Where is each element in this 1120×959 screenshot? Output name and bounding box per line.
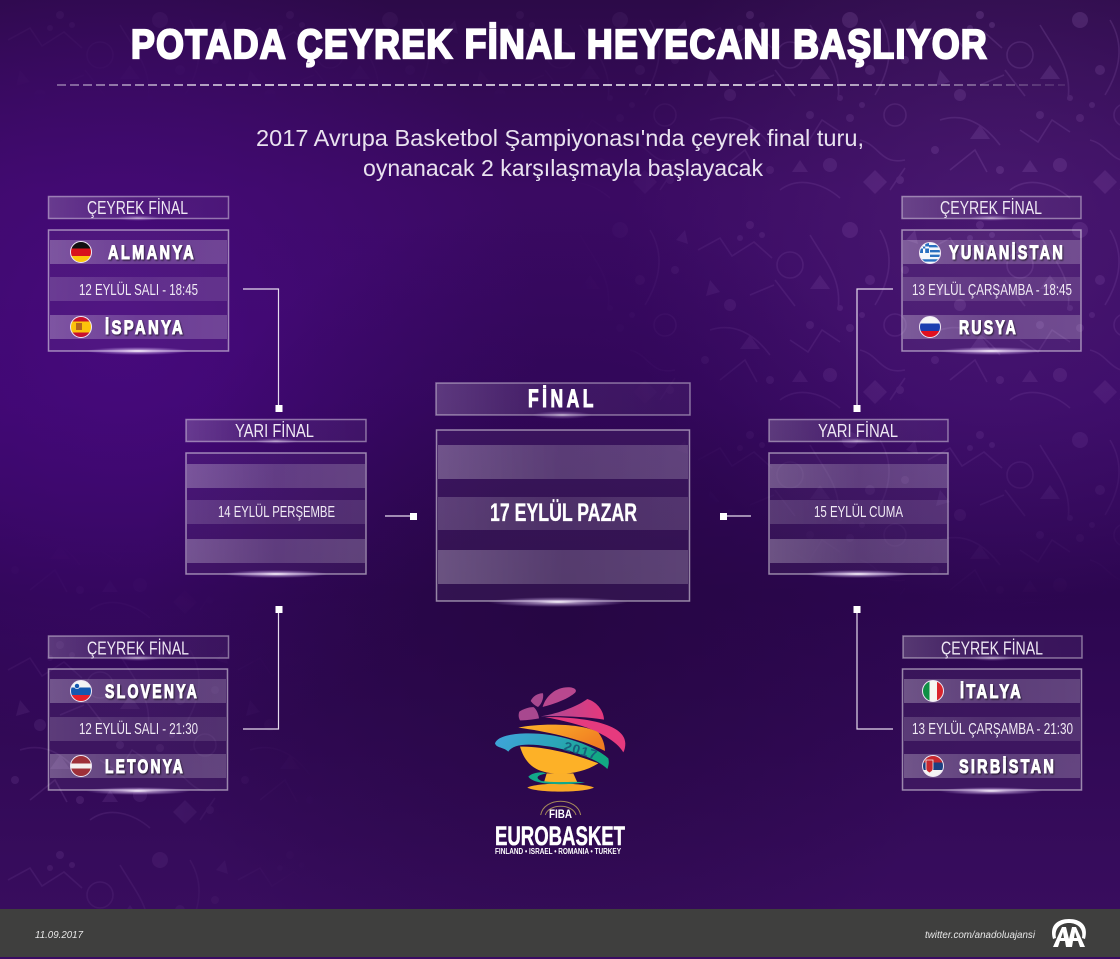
- subtitle: [256, 125, 864, 181]
- heading: semi final label: YARI FİNAL: [818, 421, 898, 441]
- match date: 17 EYLÜL PAZAR: [490, 498, 637, 527]
- team name: ALMANYA: [108, 243, 196, 264]
- panel: quarter final Slovenia-Latvia: [48, 636, 228, 795]
- heading: semi final label: YARI FİNAL: [235, 421, 314, 441]
- team name: LETONYA: [105, 757, 185, 778]
- heading: quarter final label: [48, 196, 228, 221]
- panel: left semi final: [186, 420, 366, 578]
- icon: Anadolu Agency logo: [1052, 919, 1086, 947]
- panel: quarter final Greece-Russia: [902, 196, 1081, 355]
- heading: quarter final label: [48, 636, 228, 661]
- heading: final label: FİNAL: [528, 385, 597, 413]
- title: POTADA ÇEYREK FİNAL HEYECANI BAŞLIYOR: [131, 21, 988, 67]
- team name: RUSYA: [959, 318, 1018, 339]
- team name: YUNANİSTAN: [949, 243, 1065, 264]
- match date: 14 EYLÜL PERŞEMBE: [218, 503, 335, 521]
- logo: FIBA EuroBasket 2017: FINLAND • ISRAEL • ROMANIA • TURKEY: [495, 847, 622, 856]
- date: 11.09.2017: [35, 930, 83, 941]
- team name: İTALYA: [960, 682, 1023, 703]
- icon: German flag: [70, 241, 92, 264]
- match date: 12 EYLÜL SALI - 18:45: [79, 281, 198, 299]
- connector: left semi to final: [385, 513, 417, 520]
- panel: quarter final Italy-Serbia: [902, 636, 1082, 795]
- twitter handle: twitter.com/anadoluajansi: [925, 930, 1036, 941]
- connector: bottom right: [854, 606, 893, 729]
- heading: quarter final label: [902, 196, 1081, 221]
- icon: Italian flag: [922, 680, 945, 702]
- heading: quarter final label: ÇEYREK FİNAL: [87, 638, 189, 658]
- icon: Serbian flag: [922, 755, 944, 778]
- icon: Russian flag: [919, 316, 941, 339]
- heading: semi final label: [769, 420, 948, 444]
- team name: İSPANYA: [105, 318, 185, 339]
- connector: top left: [243, 289, 282, 412]
- match date: 12 EYLÜL SALI - 21:30: [79, 720, 198, 738]
- panel: final: [436, 383, 690, 607]
- icon: Latvian flag: [70, 755, 92, 777]
- icon: Slovenian flag: [70, 680, 92, 703]
- heading: semi final label: [186, 420, 366, 444]
- icon: Greek flag: [919, 242, 941, 264]
- match date: 15 EYLÜL CUMA: [814, 503, 903, 521]
- heading: quarter final label: [903, 636, 1082, 661]
- icon: Spanish flag: [70, 316, 92, 338]
- logo: FIBA EuroBasket 2017: EUROBASKET: [495, 821, 625, 851]
- subtitle: oynanacak 2 karşılaşmayla başlayacak: [363, 155, 763, 181]
- team name: SLOVENYA: [105, 682, 199, 703]
- heading: final label: [436, 383, 690, 419]
- connector: right semi to final: [720, 513, 751, 520]
- subtitle: 2017 Avrupa Basketbol Şampiyonası'nda çeyrek final turu,: [256, 125, 864, 151]
- logo: FIBA EuroBasket 2017: [495, 687, 625, 856]
- heading: quarter final label: ÇEYREK FİNAL: [940, 198, 1042, 218]
- connector: top right: [854, 289, 893, 412]
- heading: quarter final label: ÇEYREK FİNAL: [87, 198, 188, 218]
- logo: FIBA EuroBasket 2017: 2017: [562, 738, 600, 763]
- footer bar: [0, 909, 1120, 959]
- connector: bottom left: [243, 606, 282, 729]
- panel: quarter final Germany-Spain: [48, 196, 228, 355]
- heading: quarter final label: ÇEYREK FİNAL: [941, 638, 1043, 658]
- team name: SIRBİSTAN: [959, 757, 1056, 778]
- logo: FIBA EuroBasket 2017: FIBA: [549, 807, 572, 821]
- panel: right semi final: [769, 420, 948, 578]
